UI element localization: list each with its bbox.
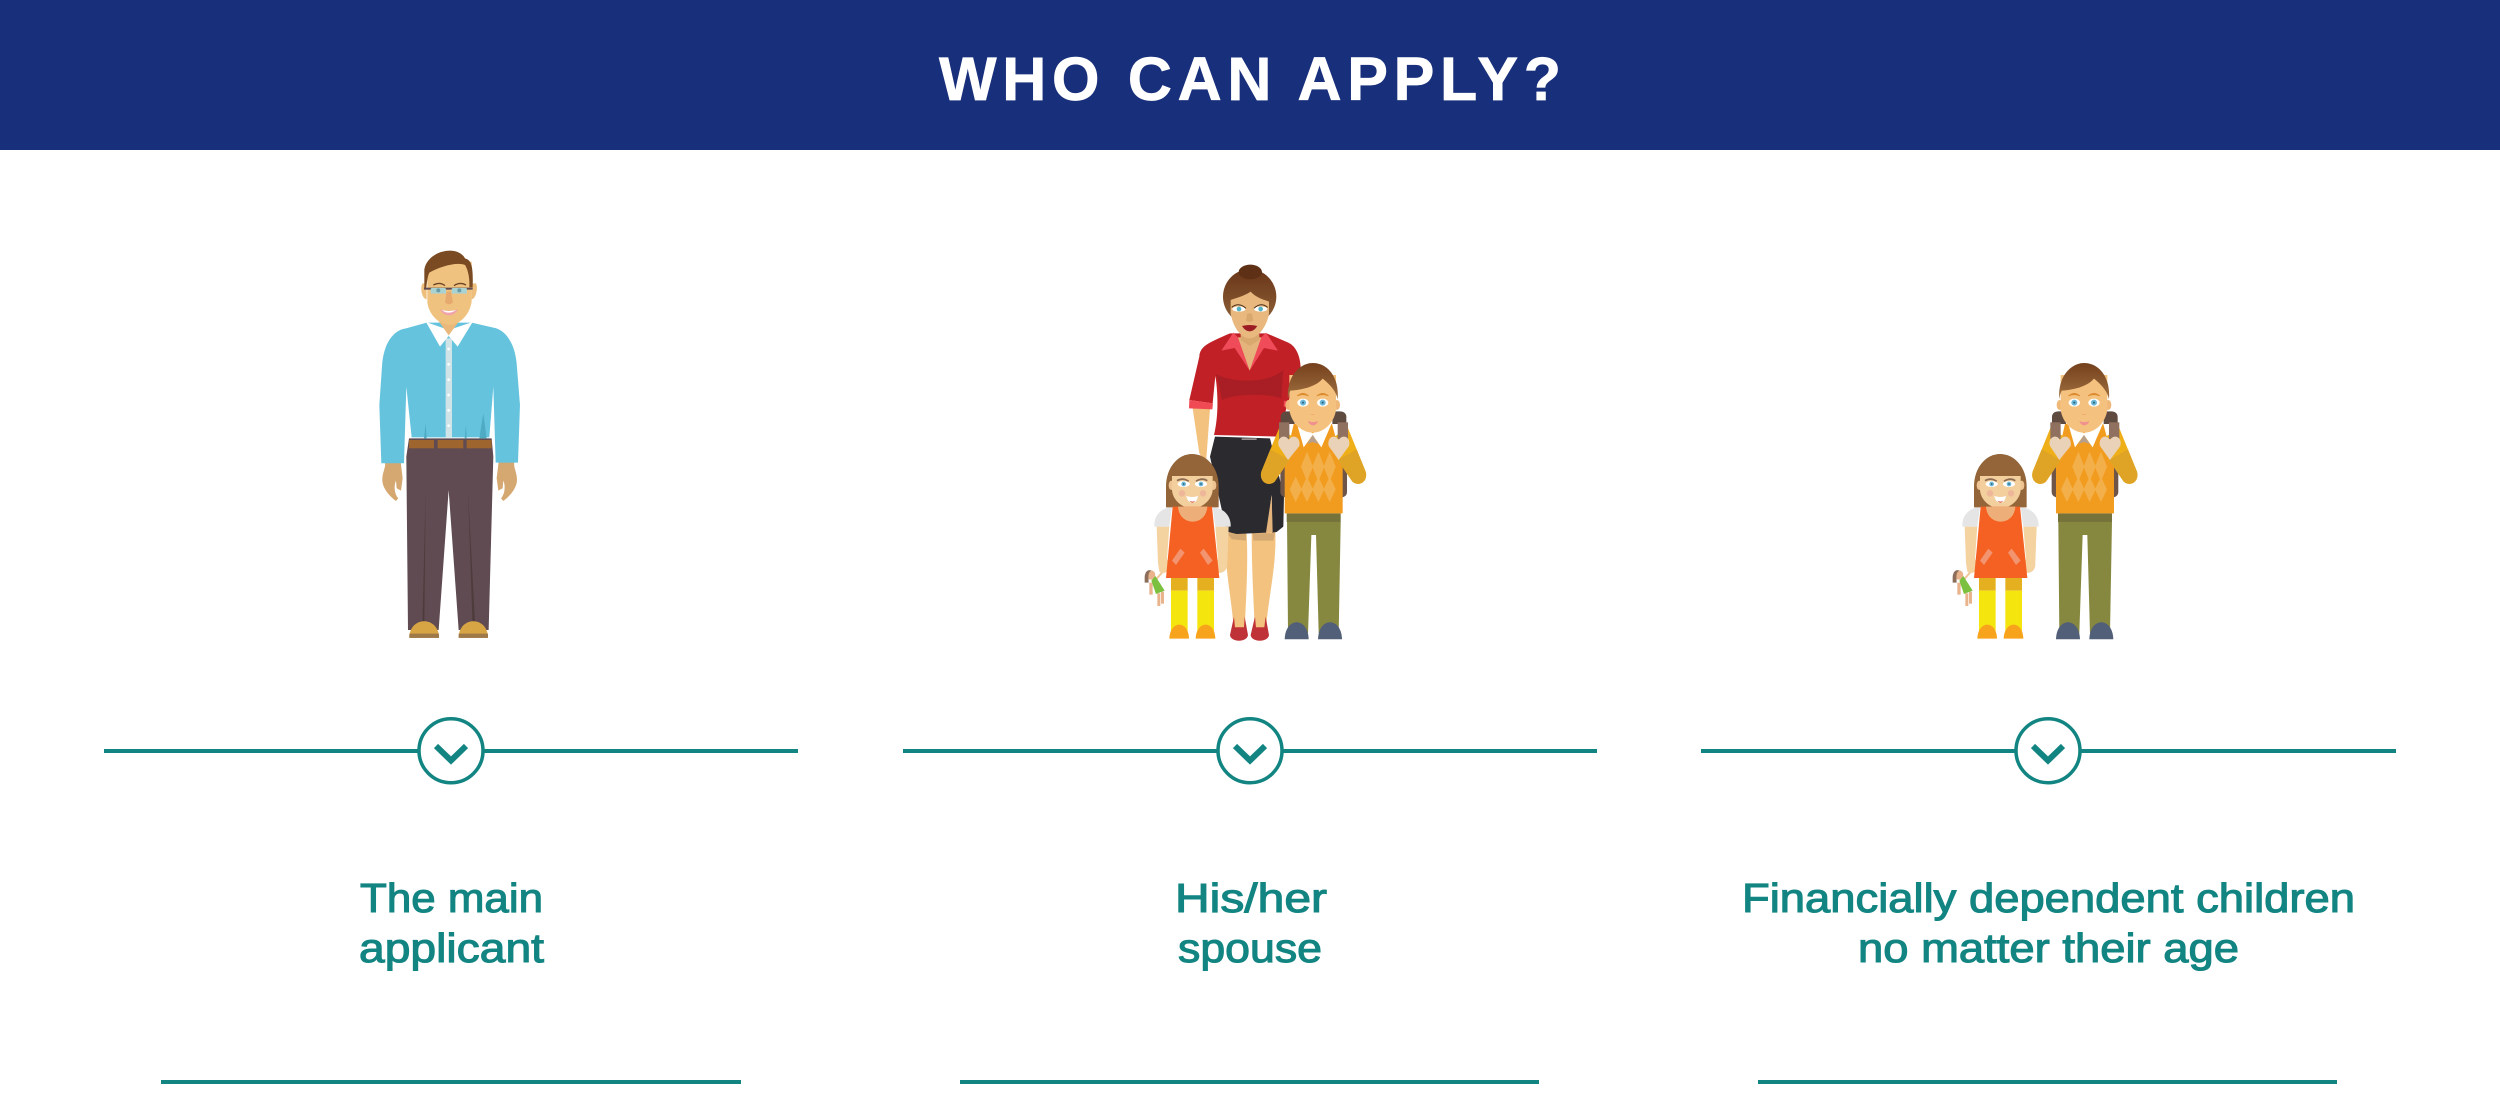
caption: main applicant — [359, 875, 545, 971]
figure: boy — [2032, 363, 2137, 639]
caption: children — [1742, 875, 2355, 971]
divider with chevron: column 2 — [903, 719, 1597, 783]
illustration: spouse and children — [1145, 265, 1366, 641]
caption: spouse — [1175, 875, 1327, 971]
header banner — [0, 0, 2500, 150]
divider with chevron: column 3 — [1701, 719, 2396, 783]
caption: children: Financially dependent children — [1742, 875, 2355, 921]
caption: spouse: spouse — [1178, 925, 1322, 971]
title: WHO CAN APPLY? — [939, 45, 1561, 113]
bottom rule: column 1 — [161, 1080, 741, 1084]
caption: main applicant: The main — [360, 875, 543, 921]
figure: girl — [1953, 454, 2039, 639]
caption: spouse: His/her — [1175, 875, 1327, 921]
figure: girl — [1145, 454, 1231, 639]
figure: boy — [1261, 363, 1366, 639]
illustration: dependent children — [1953, 363, 2137, 639]
bottom rule: column 3 — [1758, 1080, 2337, 1084]
caption: main applicant: applicant — [359, 925, 545, 971]
illustration: main applicant (man) — [379, 251, 520, 638]
divider with chevron: column 1 — [104, 719, 798, 783]
figure: woman — [1189, 265, 1301, 641]
caption: children: no matter their age — [1858, 925, 2239, 971]
bottom rule: column 2 — [960, 1080, 1539, 1084]
